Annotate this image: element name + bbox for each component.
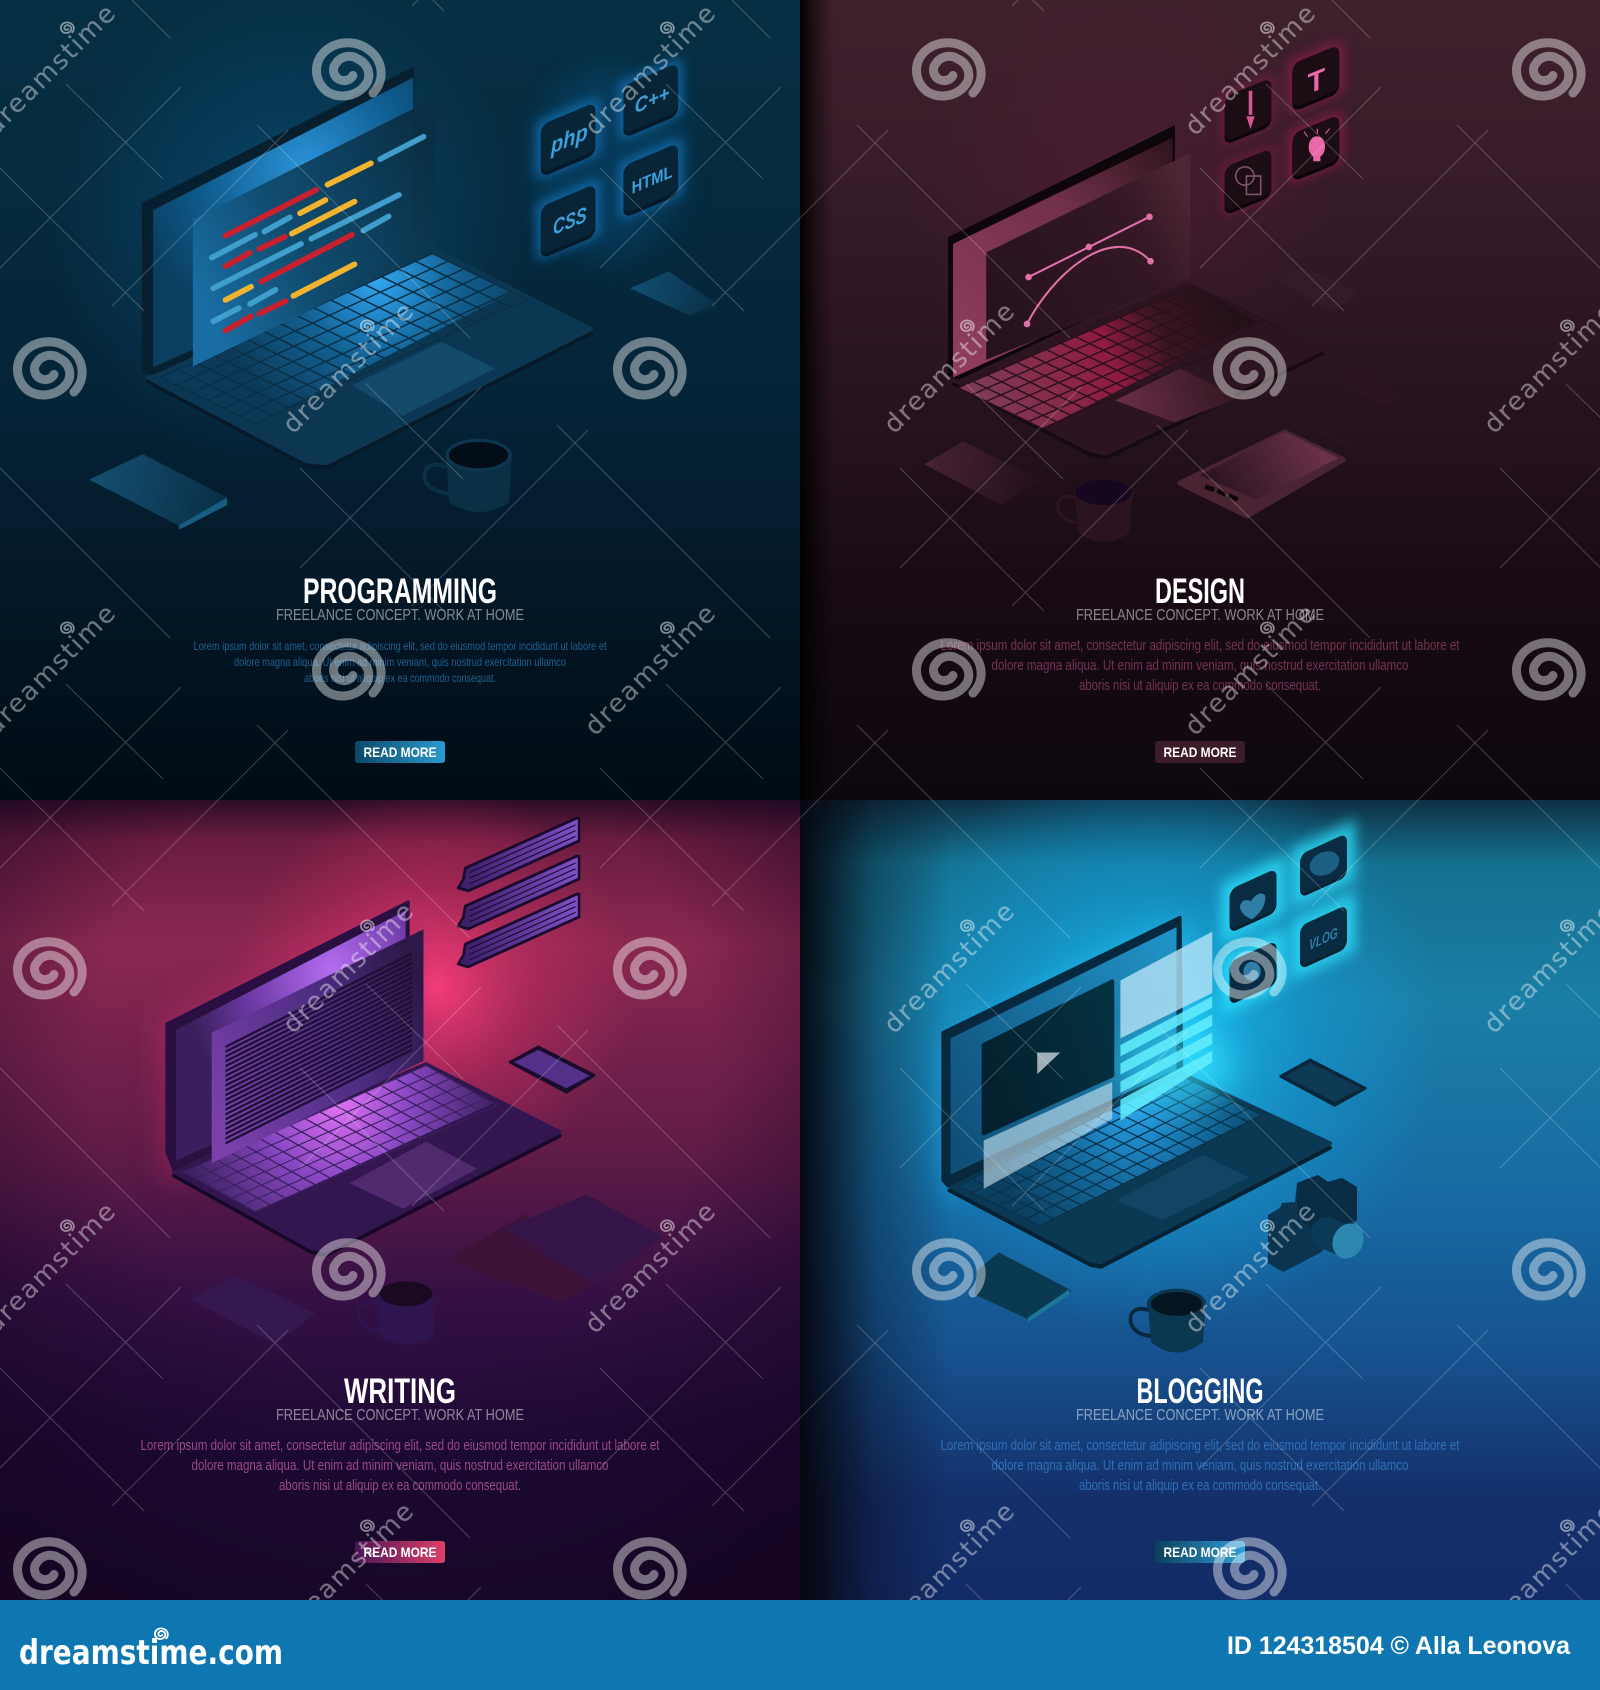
icon: C++: [623, 63, 678, 138]
icon: php: [541, 102, 595, 178]
body text: [140, 1437, 660, 1494]
icon: HTML: HTML: [632, 162, 672, 198]
body text: Lorem ipsum dolor sit amet, consectetur adipiscing elit, sed do eiusmod tempor incididunt ut labore et: [140, 1437, 660, 1454]
illustration: writing laptop scene: [167, 818, 663, 1345]
floating page right: [1120, 932, 1212, 1121]
phone: [1274, 268, 1356, 309]
subtitle: FREELANCE CONCEPT. WORK AT HOME: [276, 607, 524, 624]
icon: CSS: CSS: [553, 202, 587, 240]
code lines on screen: [212, 137, 423, 331]
watermark: dreamstime text: dreamstime: [1179, 1197, 1322, 1340]
phone: [1281, 1060, 1365, 1105]
icon: cloud: [1300, 833, 1347, 898]
icon glow: [1224, 45, 1339, 212]
keys: [1341, 370, 1402, 407]
body text: [940, 1437, 1460, 1494]
button: read more: READ MORE: [364, 744, 436, 760]
notebook: [976, 1254, 1069, 1322]
subtitle: FREELANCE CONCEPT. WORK AT HOME: [1076, 607, 1324, 624]
body text: Lorem ipsum dolor sit amet, consectetur adipiscing elit, sed do eiusmod tempor incididunt ut labore et: [940, 1437, 1460, 1454]
illustration: design laptop scene: [924, 45, 1402, 542]
notebook: [194, 1278, 312, 1342]
button: read more: [355, 1541, 445, 1563]
body text: Lorem ipsum dolor sit amet, consectetur adipiscing elit, sed do eiusmod tempor incididunt ut labore et: [940, 637, 1460, 654]
button: read more: [1155, 741, 1245, 763]
footer logo: dreamstime.com: [19, 1633, 283, 1673]
icon: type tool: T: [1308, 62, 1325, 101]
icon: shapes tool: [1224, 148, 1271, 216]
watermark: dreamstime text: dreamstime: [579, 0, 722, 142]
icon: light bulb: [1292, 114, 1339, 182]
speech bubble: [458, 856, 579, 929]
panel: blogging: [800, 800, 1600, 1600]
body text: [194, 639, 607, 685]
watermark: dreamstime text: dreamstime: [277, 897, 420, 1040]
lid glow: [953, 931, 1208, 1186]
watermark: dreamstime text: dreamstime: [1179, 0, 1322, 142]
illustration: blogging laptop scene: [943, 833, 1365, 1352]
subtitle: FREELANCE CONCEPT. WORK AT HOME: [276, 1407, 524, 1424]
speech bubble: [458, 894, 579, 967]
video player on screen: [984, 982, 1112, 1133]
title: WRITING: [344, 1372, 456, 1411]
coffee cup: [1058, 480, 1133, 542]
panel: design: [800, 0, 1600, 800]
watermark: dreamstime text: dreamstime: [878, 897, 1021, 1040]
body text: aboris nisi ut aliquip ex ea commodo consequat.: [304, 671, 496, 685]
watermark: dreamstime text: dreamstime: [878, 1497, 1021, 1640]
title: DESIGN: [1155, 572, 1245, 611]
screen glow: [1121, 1027, 1234, 1106]
text lines on screen: [226, 953, 412, 1143]
watermark: dreamstime text: dreamstime: [1179, 599, 1322, 742]
button: read more: [355, 741, 445, 763]
panel: writing: [0, 800, 800, 1600]
icon: vlog: VLOG: [1309, 925, 1338, 954]
coffee cup: [424, 439, 512, 512]
lid glow: [167, 902, 423, 1169]
laptop: [142, 66, 591, 467]
body text: aboris nisi ut aliquip ex ea commodo consequat.: [279, 1477, 521, 1494]
watermark: dreamstime text: dreamstime: [579, 1197, 722, 1340]
phone: [630, 271, 717, 319]
notebook: [924, 442, 1020, 505]
watermark: dreamstime text: dreamstime: [878, 297, 1021, 440]
button: read more: READ MORE: [1164, 1544, 1236, 1560]
title: PROGRAMMING: [303, 572, 497, 611]
icon: pen tool: [1224, 78, 1271, 145]
bezier curve on screen: [1024, 214, 1154, 327]
icon: round badge: [1230, 940, 1277, 1005]
body text: dolore magna aliqua. Ut enim ad minim veniam, quis nostrud exercitation ullamco: [234, 655, 566, 669]
icon: C++: C++: [635, 81, 669, 118]
icon: vlog: [1300, 905, 1347, 970]
laptop: [167, 902, 560, 1255]
coffee cup: [359, 1281, 435, 1345]
coffee cup: [1131, 1289, 1206, 1352]
body text: aboris nisi ut aliquip ex ea commodo consequat.: [1079, 1477, 1321, 1494]
icon glow: [533, 63, 686, 260]
image credit: ID 124318504 © Alla Leonova: [1227, 1632, 1571, 1660]
laptop: [943, 917, 1331, 1267]
body text: dolore magna aliqua. Ut enim ad minim veniam, quis nostrud exercitation ullamco: [992, 1457, 1408, 1474]
icon: CSS: [541, 184, 595, 259]
body text: Lorem ipsum dolor sit amet, consectetur adipiscing elit, sed do eiusmod tempor incididunt ut labore et: [194, 639, 607, 653]
watermark: dreamstime text: dreamstime: [277, 297, 420, 440]
button: read more: READ MORE: [364, 1544, 436, 1560]
icon: HTML: [623, 143, 678, 218]
icon: php: php: [550, 118, 588, 159]
tablet: [1180, 426, 1351, 516]
body text: aboris nisi ut aliquip ex ea commodo consequat.: [1079, 677, 1321, 694]
watermark: dreamstime text: dreamstime: [579, 599, 722, 742]
watermark: dreamstime text: dreamstime: [277, 1497, 420, 1640]
button: read more: [1155, 1541, 1245, 1563]
body text: dolore magna aliqua. Ut enim ad minim veniam, quis nostrud exercitation ullamco: [192, 1457, 608, 1474]
panel: programming: [0, 0, 800, 800]
body text: dolore magna aliqua. Ut enim ad minim veniam, quis nostrud exercitation ullamco: [992, 657, 1408, 674]
notebook: [89, 454, 227, 530]
icon: heart: [1230, 868, 1277, 933]
open papers: [446, 1194, 663, 1302]
title: BLOGGING: [1136, 1372, 1264, 1411]
icon glow: [1230, 833, 1347, 1003]
icon: type tool: [1292, 45, 1339, 112]
phone: [510, 1047, 594, 1092]
laptop: [948, 125, 1323, 458]
footer bar: [0, 1600, 1600, 1690]
illustration: programming laptop scene: [89, 63, 717, 530]
body text: [940, 637, 1460, 694]
button: read more: READ MORE: [1164, 744, 1236, 760]
speech bubble: [458, 818, 579, 891]
floating page lower: [984, 1082, 1112, 1189]
camera: [1268, 1175, 1369, 1272]
subtitle: FREELANCE CONCEPT. WORK AT HOME: [1076, 1407, 1324, 1424]
